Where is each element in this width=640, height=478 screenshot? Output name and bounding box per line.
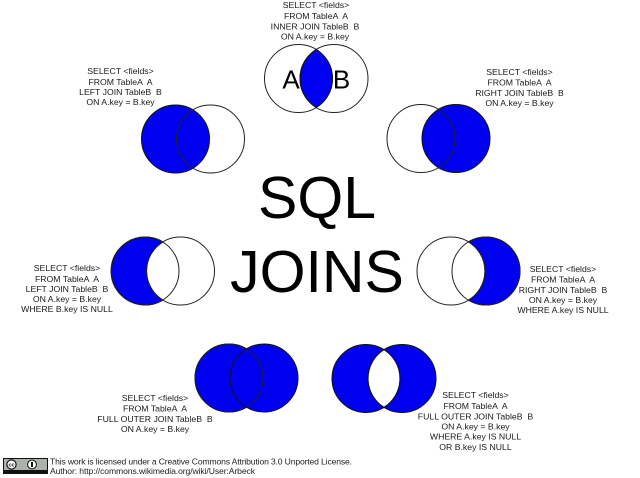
license text: Author: http://commons.wikimedia.org/wiki/User:Arbeck [50, 466, 256, 476]
query text: right join where A null: FROM TableA A [531, 274, 595, 284]
panel: right join [387, 67, 564, 172]
query text: right join: ON A.key = B.key [485, 98, 554, 108]
title: SQL JOINS: SQL [258, 165, 376, 231]
query text: left join: SELECT <fields> [87, 66, 154, 76]
query text: full outer join [97, 393, 213, 434]
query text: right join: SELECT <fields> [486, 67, 553, 77]
license text [50, 456, 352, 476]
panel: right join excluding A [417, 237, 609, 315]
query text: inner join: INNER JOIN TableB B [271, 22, 360, 32]
query text: left join: ON A.key = B.key [86, 97, 155, 107]
query text: full outer join where null: SELECT <fields> [442, 390, 509, 400]
title: SQL JOINS: JOINS [230, 239, 404, 305]
venn diagram: intersection filled: B [333, 64, 350, 94]
venn diagram: right only filled [417, 237, 520, 305]
query text: left join where B null: SELECT <fields> [34, 263, 100, 273]
query text: left join [79, 66, 162, 107]
query text: full outer join where null: OR B.key IS NULL [439, 442, 512, 452]
query text: full outer join where null: FROM TableA A [443, 401, 508, 411]
query text: left join: LEFT JOIN TableB B [79, 87, 162, 97]
query text: left join where B null: ON A.key = B.key [33, 294, 102, 304]
query text: right join where A null [517, 264, 609, 315]
venn diagram: outer parts filled [332, 344, 436, 412]
query text: full outer join: SELECT <fields> [122, 393, 188, 403]
query text: left join where B null: FROM TableA A [35, 274, 99, 284]
panel: left join excluding B [21, 237, 214, 314]
query text: right join [475, 67, 564, 108]
query text: right join where A null: SELECT <fields> [530, 264, 596, 274]
query text: inner join [271, 0, 360, 42]
venn diagram: left only filled [111, 237, 214, 305]
panel: inner join [264, 0, 368, 112]
query text: full outer join where null: FULL OUTER JOIN TableB B [418, 412, 533, 422]
query text: full outer join where null: WHERE A.key IS NULL [430, 432, 521, 442]
query text: right join where A null: ON A.key = B.key [529, 295, 598, 305]
query text: right join: FROM TableA A [487, 78, 552, 88]
venn diagram: intersection filled [264, 44, 368, 112]
license text: This work is licensed under a Creative Commons Attribution 3.0 Unported License. [50, 456, 352, 466]
icon: CC BY badge [4, 458, 48, 474]
query text: full outer join: FULL OUTER JOIN TableB B [97, 414, 213, 424]
query text: left join where B null: LEFT JOIN TableB B [26, 284, 109, 294]
query text: right join where A null: WHERE A.key IS NULL [517, 305, 609, 315]
query text: right join where A null: RIGHT JOIN TableB B [519, 285, 607, 295]
venn diagram: right circle filled [387, 104, 490, 172]
venn diagram: intersection filled: A [282, 64, 300, 94]
venn diagram: left circle filled [142, 105, 244, 173]
query text: full outer join where null: ON A.key = B.key [441, 422, 510, 432]
query text: full outer join: FROM TableA A [123, 404, 187, 414]
query text: left join: FROM TableA A [88, 77, 153, 87]
venn diagram: both filled [195, 344, 298, 412]
title: SQL JOINS [230, 165, 404, 305]
panel: full outer join [97, 344, 298, 434]
panel: full outer join excluding intersection [332, 344, 533, 452]
query text: full outer join: ON A.key = B.key [121, 424, 190, 434]
query text: left join where B null [21, 263, 113, 314]
query text: inner join: ON A.key = B.key [281, 32, 350, 42]
panel: left join [79, 66, 244, 173]
query text: left join where B null: WHERE B.key IS NULL [21, 304, 113, 314]
query text: inner join: SELECT <fields> [283, 0, 349, 10]
query text: full outer join where null [418, 390, 533, 452]
query text: right join: RIGHT JOIN TableB B [475, 88, 564, 98]
icon: CC BY badge: cc [8, 462, 15, 468]
query text: inner join: FROM TableA A [284, 11, 348, 21]
